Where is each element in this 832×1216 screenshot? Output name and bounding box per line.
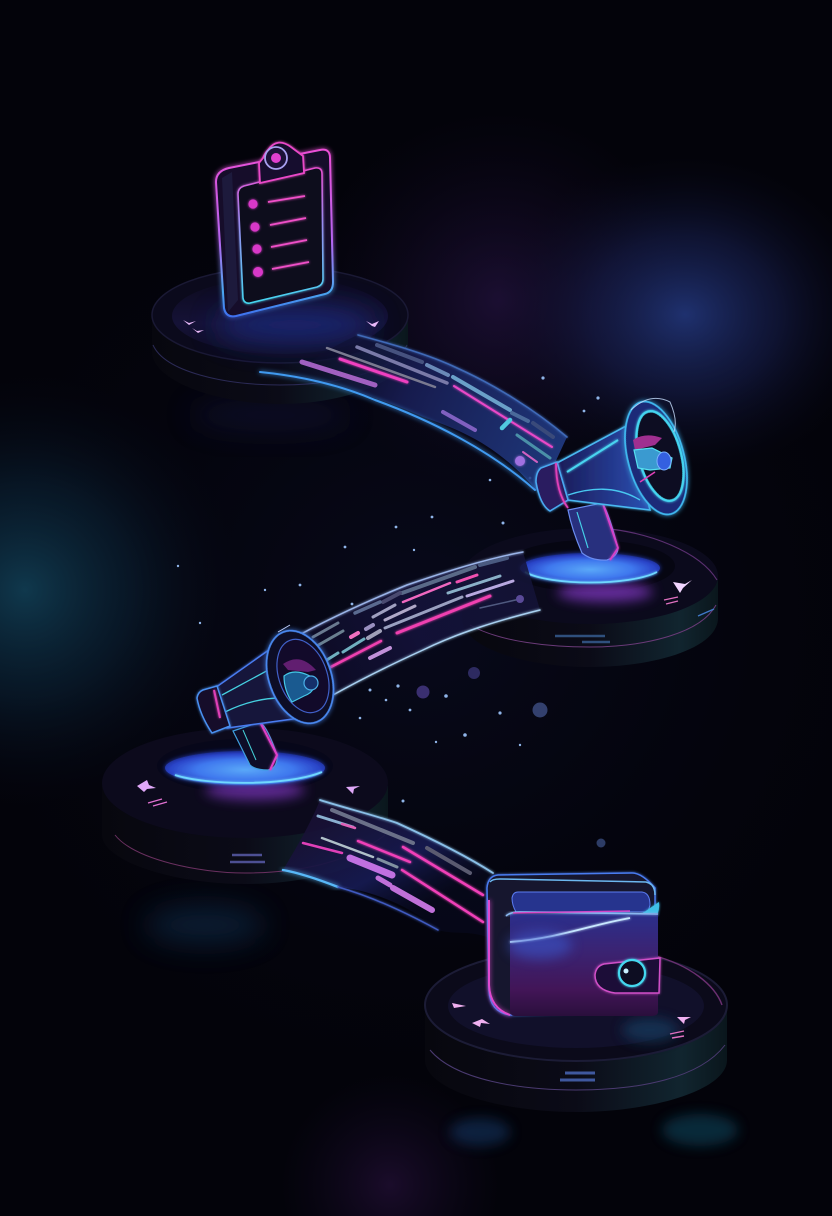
platform 4: base for wallet: [425, 949, 727, 1112]
clipboard checklist bullets: [248, 199, 263, 277]
icon: wallet: [487, 873, 660, 1016]
megaphone rear cap: [536, 462, 568, 511]
icon: megaphone left: [197, 621, 346, 770]
wallet clasp: [595, 958, 660, 993]
megaphone bell: [614, 395, 698, 521]
megaphone body: [215, 645, 300, 728]
platform 2: base for megaphone: [462, 528, 718, 667]
particles: [177, 376, 606, 848]
platform 3: base for second megaphone: [102, 728, 388, 884]
wallet back panel: [487, 873, 655, 1015]
megaphone rear cap: [197, 686, 230, 733]
megaphone bell: [254, 621, 346, 733]
icon: megaphone right: [536, 395, 698, 560]
megaphone handle: [233, 722, 277, 770]
icon: clipboard: [216, 143, 333, 316]
wallet front pocket: [510, 913, 658, 1016]
ribbon 3: data flow from megaphone to wallet: [283, 800, 493, 938]
platform 1: base for clipboard: [152, 267, 408, 404]
megaphone handle: [568, 503, 618, 560]
ribbon 1: data flow from clipboard to megaphone: [260, 335, 567, 495]
clipboard clip: [259, 143, 304, 183]
wallet inner card: [512, 892, 650, 912]
megaphone body: [557, 425, 650, 510]
clipboard checklist lines: [268, 196, 309, 269]
ribbon 2: data flow between megaphones: [290, 552, 540, 695]
